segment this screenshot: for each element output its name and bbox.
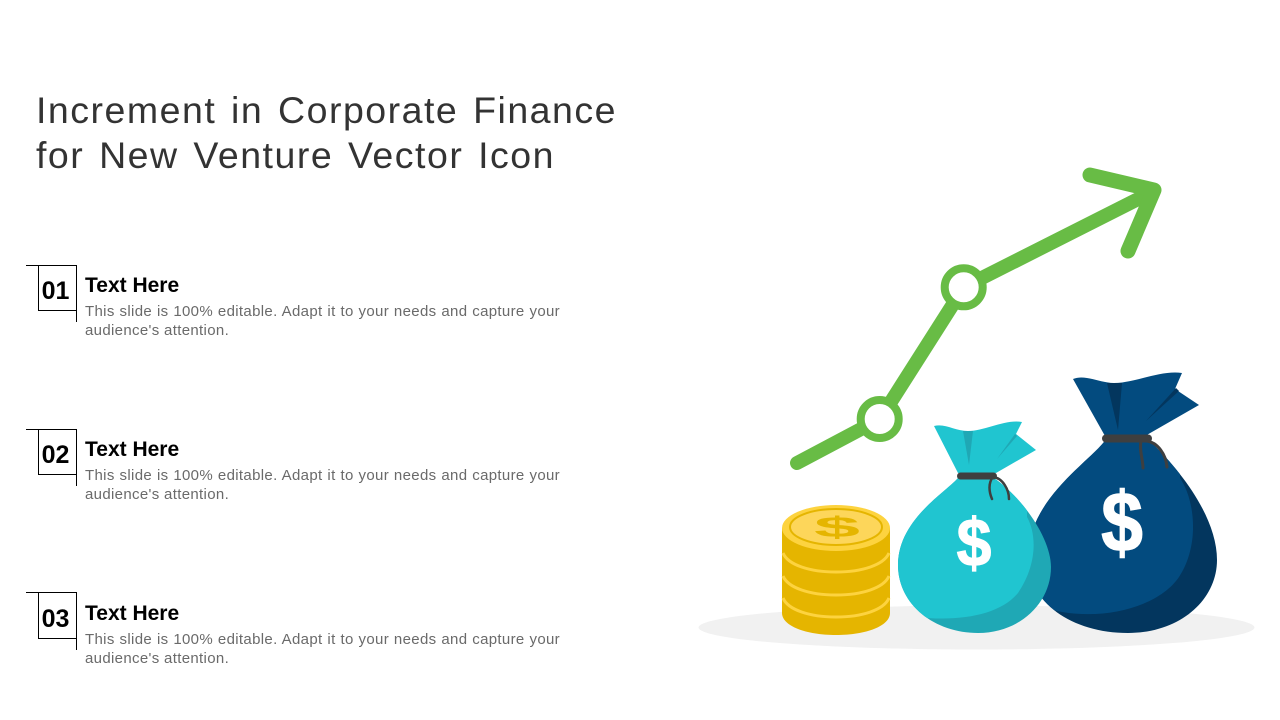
- icon: teal money bag: [898, 422, 1051, 633]
- illustration: finance growth icon: [698, 168, 1254, 650]
- icon: gold coin stack: [782, 505, 890, 635]
- icon: large navy money bag: [1036, 372, 1217, 633]
- description 03: audience's attention.: [85, 650, 229, 667]
- dollar sign: $: [957, 505, 991, 581]
- list item 01: [26, 265, 560, 339]
- ground shadow: [698, 606, 1254, 650]
- heading 02: Text Here: [85, 438, 179, 461]
- list item 02: [26, 429, 560, 503]
- icon: growth arrow: [797, 175, 1154, 463]
- title: for New Venture Vector Icon: [36, 134, 555, 176]
- description 01: [85, 303, 560, 339]
- number 01: 01: [42, 277, 69, 305]
- description 02: audience's attention.: [85, 486, 229, 503]
- title: [36, 89, 617, 176]
- description 01: audience's attention.: [85, 322, 229, 339]
- description 02: [85, 467, 560, 503]
- number 03: 03: [42, 605, 69, 633]
- title: Increment in Corporate Finance: [36, 89, 617, 131]
- heading 01: Text Here: [85, 274, 179, 297]
- description 03: [85, 631, 560, 667]
- coin dollar sign: $: [814, 512, 860, 544]
- description 01: This slide is 100% editable. Adapt it to your needs and capture your: [85, 303, 560, 320]
- number 02: 02: [42, 441, 69, 469]
- description 02: This slide is 100% editable. Adapt it to your needs and capture your: [85, 467, 560, 484]
- dollar sign: $: [1101, 475, 1143, 569]
- heading 03: Text Here: [85, 602, 179, 625]
- list item 03: [26, 592, 560, 667]
- description 03: This slide is 100% editable. Adapt it to your needs and capture your: [85, 631, 560, 648]
